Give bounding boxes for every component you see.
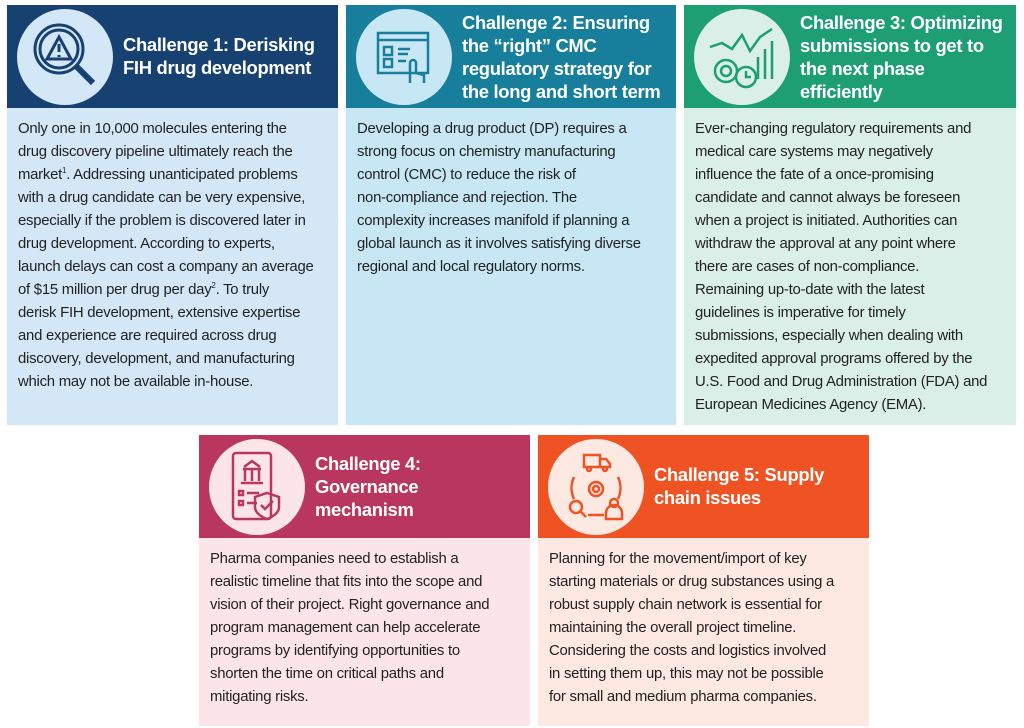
- icon: supply chain: [548, 439, 644, 535]
- body text 3: influence the fate of a once-promising: [695, 167, 934, 183]
- heading 5: [654, 464, 824, 508]
- body text 3: candidate and cannot always be foreseen: [695, 190, 960, 206]
- heading 3: submissions to get to: [800, 35, 984, 56]
- body text 2: non-compliance and rejection. The: [357, 190, 577, 206]
- heading 4: Challenge 4:: [315, 453, 421, 474]
- heading 3: the next phase: [800, 58, 925, 79]
- body text 1: [7, 108, 338, 425]
- icon: checklist screen: [356, 9, 452, 105]
- body text 5: robust supply chain network is essential for: [549, 597, 822, 613]
- body text 5: in setting them up, this may not be possible: [549, 666, 824, 682]
- body text 3: guidelines is imperative for timely: [695, 305, 906, 321]
- icon: magnifier warning: [17, 9, 113, 105]
- body text 5: maintaining the overall project timeline.: [549, 620, 796, 636]
- heading 3: efficiently: [800, 81, 883, 102]
- header 4: [199, 435, 530, 538]
- heading 2: regulatory strategy for: [462, 58, 651, 79]
- heading 1: Challenge 1: Derisking: [123, 34, 315, 55]
- heading 4: Governance: [315, 476, 418, 497]
- body text 1: drug discovery pipeline ultimately reach the: [18, 144, 293, 160]
- body text 2: control (CMC) to reduce the risk of: [357, 167, 576, 183]
- body text 5: Considering the costs and logistics involved: [549, 643, 826, 659]
- body text 2: Developing a drug product (DP) requires a: [357, 121, 627, 137]
- body text 1: drug development. According to experts,: [18, 236, 275, 252]
- heading 2: [462, 12, 660, 102]
- body text 2: regional and local regulatory norms.: [357, 259, 585, 275]
- icon: governance document: [209, 439, 305, 535]
- body text 5: for small and medium pharma companies.: [549, 689, 817, 705]
- body text 1: launch delays can cost a company an average: [18, 259, 314, 275]
- body text 3: withdraw the approval at any point where: [695, 236, 956, 252]
- heading 3: [800, 12, 1003, 102]
- body text 3: expedited approval programs offered by the: [695, 351, 972, 367]
- panel: challenge 4: [199, 435, 530, 726]
- body text 2: global launch as it involves satisfying diverse: [357, 236, 641, 252]
- body text 3: there are cases of non-compliance.: [695, 259, 919, 275]
- body text 4: shorten the time on critical paths and: [210, 666, 444, 682]
- header 1: [7, 5, 338, 108]
- heading 3: Challenge 3: Optimizing: [800, 12, 1003, 33]
- body text 4: realistic timeline that fits into the scope and: [210, 574, 482, 590]
- body text 5: starting materials or drug substances using a: [549, 574, 834, 590]
- body text 1: of $15 million per drug per day2. To truly: [18, 281, 269, 298]
- header 2: [346, 5, 676, 108]
- body text 4: program management can help accelerate: [210, 620, 480, 636]
- body text 4: mitigating risks.: [210, 689, 308, 705]
- icon: gears chart: [694, 9, 790, 105]
- body text 1: especially if the problem is discovered later in: [18, 213, 306, 229]
- body text 2: complexity increases manifold if planning a: [357, 213, 629, 229]
- body text 5: Planning for the movement/import of key: [549, 551, 807, 567]
- header 5: [538, 435, 869, 538]
- panel: challenge 5: [538, 435, 869, 726]
- heading 2: the long and short term: [462, 81, 660, 102]
- body text 1: and experience are required across drug: [18, 328, 276, 344]
- body text 2: strong focus on chemistry manufacturing: [357, 144, 615, 160]
- body text 3: Remaining up-to-date with the latest: [695, 282, 924, 298]
- body text 4: vision of their project. Right governance and: [210, 597, 489, 613]
- heading 2: the “right” CMC: [462, 35, 596, 56]
- body text 3: submissions, especially when dealing with: [695, 328, 963, 344]
- body text 3: European Medicines Agency (EMA).: [695, 397, 926, 413]
- header 3: [684, 5, 1016, 108]
- body text 1: market1. Addressing unanticipated problems: [18, 166, 298, 183]
- body text 3: medical care systems may negatively: [695, 144, 933, 160]
- body text 3: when a project is initiated. Authorities can: [695, 213, 957, 229]
- heading 1: FIH drug development: [123, 57, 311, 78]
- body text 3: Ever-changing regulatory requirements and: [695, 121, 971, 137]
- body text 3: U.S. Food and Drug Administration (FDA) and: [695, 374, 987, 390]
- body text 1: with a drug candidate can be very expensive,: [18, 190, 305, 206]
- heading 5: chain issues: [654, 487, 761, 508]
- body text 1: which may not be available in-house.: [18, 374, 253, 390]
- heading 1: [123, 34, 315, 78]
- heading 5: Challenge 5: Supply: [654, 464, 824, 485]
- body text 3: [684, 108, 1016, 425]
- body text 1: discovery, development, and manufacturing: [18, 351, 295, 367]
- panel: challenge 2: [346, 5, 676, 425]
- heading 4: mechanism: [315, 499, 414, 520]
- body text 1: derisk FIH development, extensive expertise: [18, 305, 300, 321]
- body text 4: Pharma companies need to establish a: [210, 551, 458, 567]
- panel: challenge 1: [7, 5, 338, 425]
- body text 5: [538, 538, 869, 726]
- heading 2: Challenge 2: Ensuring: [462, 12, 650, 33]
- body text 4: programs by identifying opportunities to: [210, 643, 460, 659]
- body text 4: [199, 538, 530, 726]
- body text 2: [346, 108, 676, 425]
- panel: challenge 3: [684, 5, 1016, 425]
- body text 1: Only one in 10,000 molecules entering the: [18, 121, 287, 137]
- heading 4: [315, 453, 421, 520]
